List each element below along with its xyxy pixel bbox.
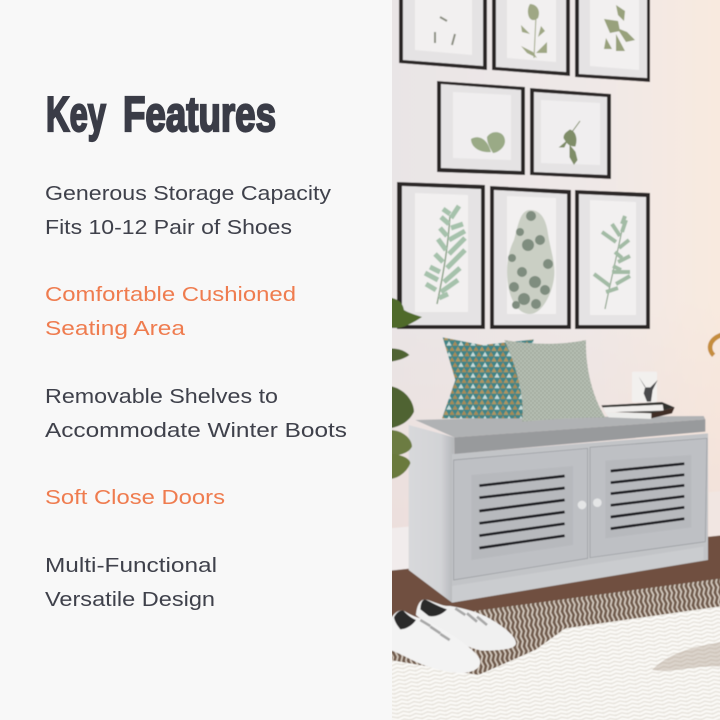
floor (390, 535, 720, 623)
feature: multi-functional (45, 554, 217, 611)
bench (409, 416, 708, 603)
feature: removable shelves: Removable Shelves to (45, 385, 278, 408)
baseboard (392, 526, 408, 571)
heading: Key Features (46, 88, 276, 142)
seat cushion (415, 416, 705, 454)
feature: cushioned seating (45, 283, 296, 340)
wall hook (710, 335, 720, 355)
books (601, 402, 675, 419)
feature: cushioned seating: Seating Area (45, 317, 186, 340)
shoe front (390, 610, 480, 673)
room photo (390, 0, 720, 720)
wall (390, 0, 720, 580)
rug (390, 578, 720, 720)
shoe rear (416, 599, 516, 651)
mug (632, 372, 658, 402)
plant leaf upper (390, 298, 422, 328)
frame top middle (492, 0, 570, 76)
feature: multi-functional: Multi-Functional (45, 554, 217, 577)
heading: Key Features: Key (46, 88, 106, 142)
feature: storage capacity (45, 182, 332, 239)
feature: multi-functional: Versatile Design (45, 588, 215, 611)
bench front (452, 433, 708, 603)
feature: storage capacity: Generous Storage Capacity (45, 182, 332, 205)
frame lower left with fern (397, 182, 485, 329)
feature: removable shelves (45, 385, 347, 442)
bench plinth (452, 592, 508, 603)
frame middle right (530, 88, 611, 179)
feature: storage capacity: Fits 10-12 Pair of Shoes (45, 216, 292, 239)
left door (454, 448, 588, 580)
frame top right (575, 0, 650, 82)
plant leaves (390, 348, 414, 479)
frame top left (399, 0, 487, 70)
pillow grey speckled (504, 340, 605, 422)
frame lower middle with eucalyptus (490, 186, 571, 329)
feature: cushioned seating: Comfortable Cushioned (45, 283, 296, 306)
left text panel (0, 0, 392, 720)
frame lower right with sprig (575, 190, 650, 329)
frame middle left (437, 81, 525, 175)
pillow teal and gold (442, 337, 534, 418)
feature: removable shelves: Accommodate Winter Boots (45, 419, 347, 442)
lower scene in zoomed coordinates (390, 335, 720, 720)
feature: soft close doors: Soft Close Doors (45, 486, 225, 509)
door knobs (578, 498, 602, 509)
heading: Key Features: Features (123, 88, 276, 142)
right door (590, 438, 707, 558)
bench side panel (409, 425, 454, 603)
